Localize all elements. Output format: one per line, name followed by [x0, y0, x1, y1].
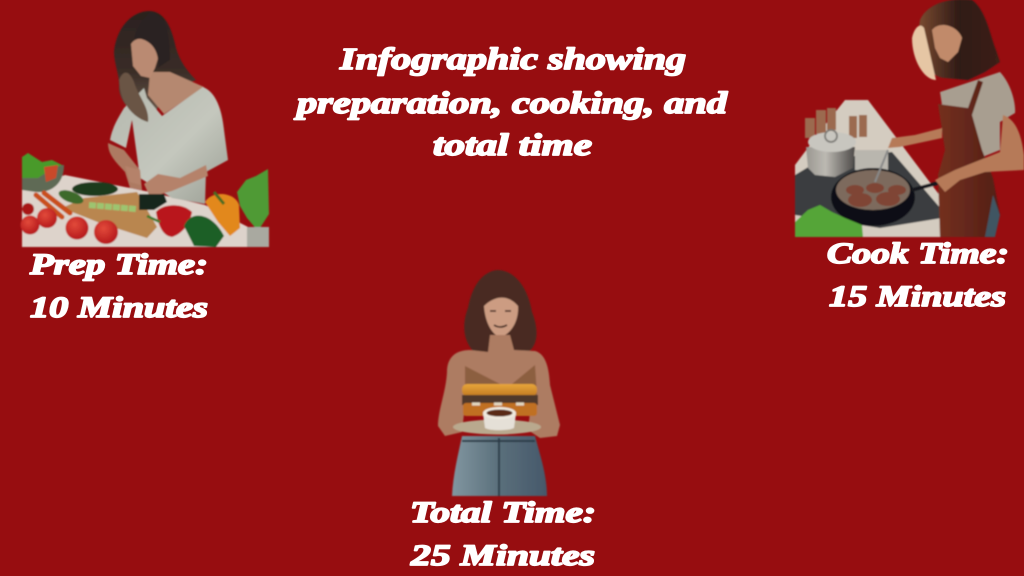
neck and chest: [148, 72, 204, 114]
label: total time: [410, 496, 596, 572]
label: total time: Total Time:: [410, 496, 596, 529]
apron: [938, 80, 1000, 237]
face: [484, 298, 518, 337]
pot: [806, 147, 855, 177]
arms: [108, 143, 142, 190]
knife hand: [125, 166, 141, 185]
label: total time: 25 Minutes: [410, 539, 595, 572]
body side: [985, 195, 1000, 237]
patties: [846, 183, 906, 207]
title: Infographic showing: [339, 41, 686, 76]
stove: [795, 152, 948, 228]
top: [465, 365, 537, 395]
table: [22, 175, 250, 247]
orange pepper: [205, 194, 240, 236]
illustration: woman preparing vegetables: [20, 11, 269, 247]
salad bowl: [22, 165, 64, 192]
lettuce: [237, 169, 269, 231]
green pepper: [184, 216, 224, 247]
title: total time: [433, 127, 592, 162]
title: preparation, cooking, and: [293, 85, 728, 120]
hair lock: [119, 73, 148, 122]
sandwich: [462, 384, 537, 396]
ramekin: [483, 414, 516, 430]
title: [293, 41, 728, 162]
label: cook time: [827, 237, 1009, 313]
carrots: [36, 193, 70, 217]
lettuce: [795, 205, 863, 237]
label: cook time: 15 Minutes: [829, 280, 1006, 313]
illustration: woman holding sandwich: [438, 270, 560, 496]
label: prep time: [29, 248, 208, 324]
face: [131, 39, 160, 78]
label: cook time: Cook Time:: [827, 237, 1009, 270]
arms: [935, 115, 1024, 192]
tomatoes: [66, 216, 88, 240]
eyes and smile: [490, 311, 511, 327]
label: prep time: Prep Time:: [29, 248, 208, 281]
neck and shoulders: [438, 335, 560, 438]
burner grate: [855, 150, 888, 170]
label: prep time: 10 Minutes: [30, 291, 208, 324]
shirt: [940, 72, 1015, 160]
red pepper: [156, 205, 192, 237]
utensil: [875, 150, 888, 182]
hair: [114, 11, 196, 122]
shirt: [110, 87, 228, 204]
jeans: [452, 436, 547, 496]
hair over face side: [134, 12, 170, 68]
hair: [919, 0, 1000, 80]
counter: [795, 100, 971, 237]
hair: [464, 270, 537, 356]
face: [932, 25, 962, 62]
glass: [247, 227, 269, 247]
cucumbers: [72, 182, 118, 196]
spice jars: [805, 108, 867, 138]
illustration: woman cooking at stove: [795, 0, 1024, 237]
cutting board: [62, 192, 157, 238]
plate: [453, 420, 541, 434]
pan: [831, 168, 915, 226]
